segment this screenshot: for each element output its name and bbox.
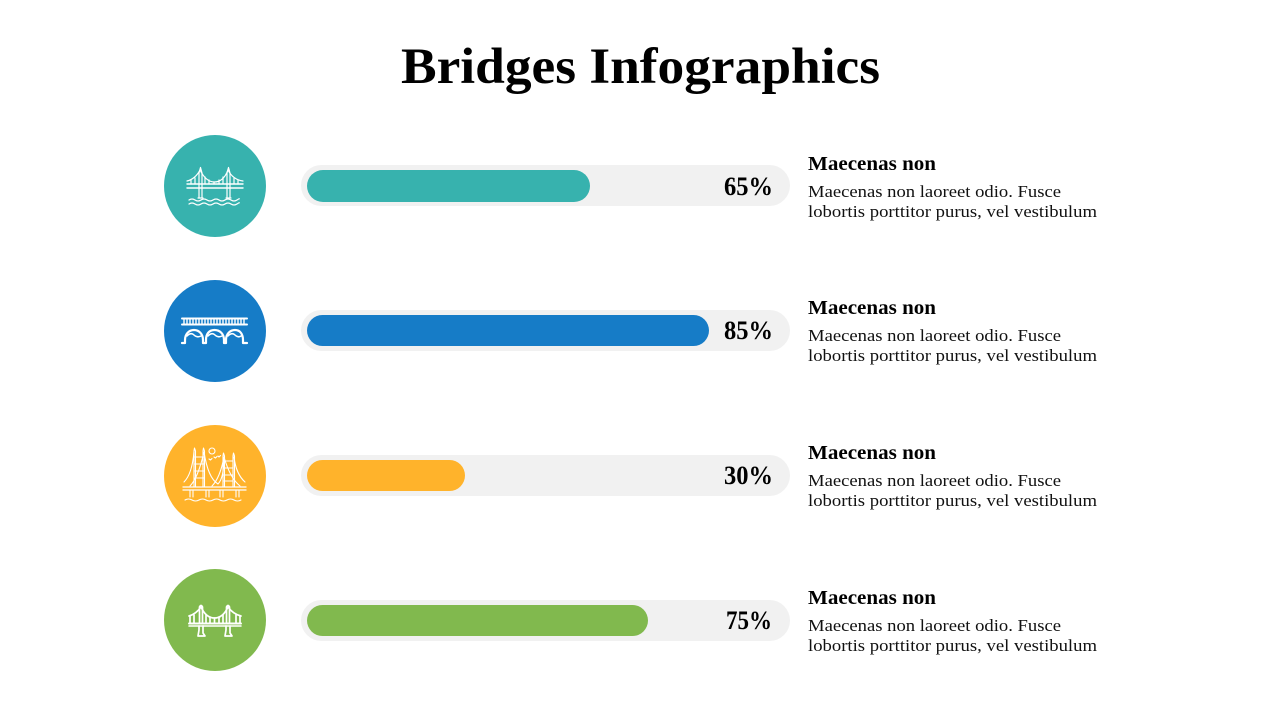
text block — [808, 297, 1097, 365]
progress bar 75% — [307, 605, 648, 636]
text block: Maecenas non laoreet odio. Fusce — [808, 182, 1061, 201]
row 4: green bridge, 75% — [164, 569, 1097, 671]
text block: Maecenas non laoreet odio. Fusce — [808, 326, 1061, 345]
value: 85% — [724, 316, 773, 345]
progress bar 65% — [307, 170, 590, 202]
row 2: blue bridge, 85% — [164, 280, 1097, 382]
icon: suspension bridge over water — [164, 135, 266, 237]
progress track — [301, 600, 790, 641]
icon: arched bridge — [164, 280, 266, 382]
progress track — [301, 165, 790, 206]
value: 65% — [724, 172, 773, 201]
text block: Maecenas non — [808, 297, 936, 319]
title: Bridges Infographics — [401, 39, 880, 95]
progress track — [301, 455, 790, 496]
text block: Maecenas non laoreet odio. Fusce — [808, 616, 1061, 635]
text block — [808, 587, 1097, 655]
text block: Maecenas non — [808, 587, 936, 609]
row 1: teal bridge, 65% — [164, 135, 1097, 237]
progress bar 85% — [307, 315, 709, 346]
text block: lobortis porttitor purus, vel vestibulum — [808, 636, 1097, 655]
progress bar 30% — [307, 460, 465, 491]
icon: tall twin-tower bridge with sun and birds — [164, 425, 266, 527]
text block — [808, 153, 1097, 221]
progress track — [301, 310, 790, 351]
text block — [808, 442, 1097, 510]
value: 75% — [726, 606, 772, 635]
text block: Maecenas non — [808, 442, 936, 464]
value: 30% — [724, 461, 773, 490]
text block: lobortis porttitor purus, vel vestibulum — [808, 491, 1097, 510]
icon: suspension bridge on piers — [164, 569, 266, 671]
text block: Maecenas non laoreet odio. Fusce — [808, 471, 1061, 490]
text block: lobortis porttitor purus, vel vestibulum — [808, 346, 1097, 365]
row 3: orange bridge, 30% — [164, 425, 1097, 527]
text block: Maecenas non — [808, 153, 936, 175]
text block: lobortis porttitor purus, vel vestibulum — [808, 202, 1097, 221]
